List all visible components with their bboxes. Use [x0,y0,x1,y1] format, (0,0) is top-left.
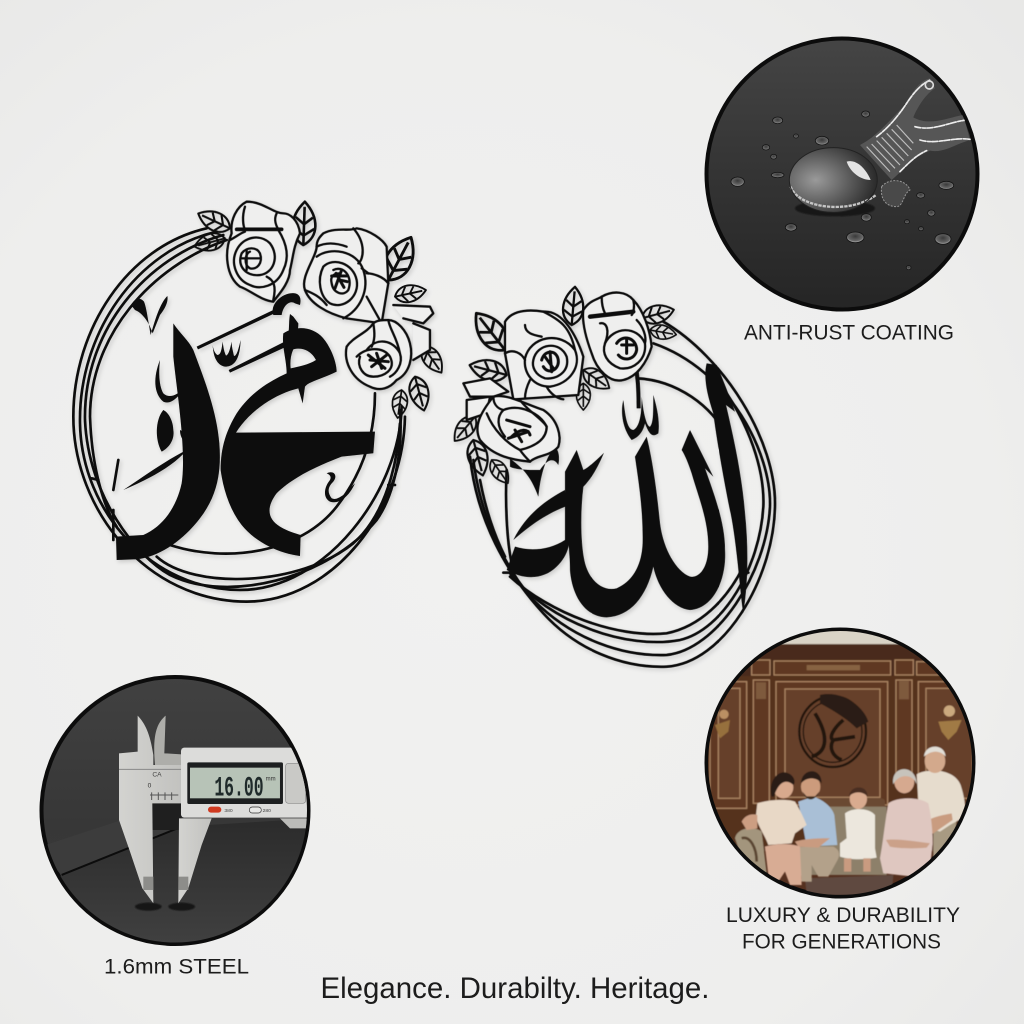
tagline: Elegance. Durabilty. Heritage. [320,972,710,1005]
person: father [795,771,839,882]
caliper jaws: 0 [148,783,152,790]
water splash [860,78,970,207]
ceiling and wood panelling [700,625,980,851]
caliper display: 16.00 [214,774,264,805]
caption: luxury and durability: FOR GENERATIONS [742,928,941,954]
wall lamps [715,705,962,740]
caption: luxury and durability: LUXURY & DURABILITY [726,902,960,927]
caliper display [181,748,314,828]
leaves [192,201,448,419]
person: grandmother [880,769,933,877]
large water drop [789,148,877,216]
caption: 1.6mm steel: 1.6mm STEEL [104,956,249,978]
rose: large centre [505,311,583,399]
caption: luxury and durability [726,902,960,954]
wall art: Allah calligraphy with roses [448,286,775,667]
caliper jaws [119,716,212,903]
rose: top left [227,202,300,302]
photo circle: anti-rust water beading [706,38,978,310]
photo circle: caliper measuring steel [35,677,315,950]
wire rings [470,322,775,667]
caption: anti-rust coating: ANTI-RUST COATING [744,322,954,344]
photo circle: family under wall art [700,625,980,896]
leaves [448,286,677,487]
wall art: Muhammad calligraphy with roses [73,201,448,602]
rose: upper right [583,293,652,381]
rose: lower right [346,305,433,389]
miniature wall art [799,694,868,767]
caliper display: mm [266,776,276,782]
small droplets [731,111,954,270]
calligraphy strokes [116,293,375,560]
sofa [735,798,957,875]
person: girl [840,787,877,872]
rose: lower left [463,378,560,462]
calligraphy strokes [507,345,747,617]
coffee table [805,875,893,895]
caliper display: 280 [263,808,271,814]
rose: top centre [304,228,388,323]
person: grandfather [917,747,965,834]
steel sheet [48,804,306,942]
caliper jaws: CA [152,772,162,779]
person: mother [742,772,807,885]
wire rings [73,228,405,602]
caliper display: 380 [224,808,233,814]
